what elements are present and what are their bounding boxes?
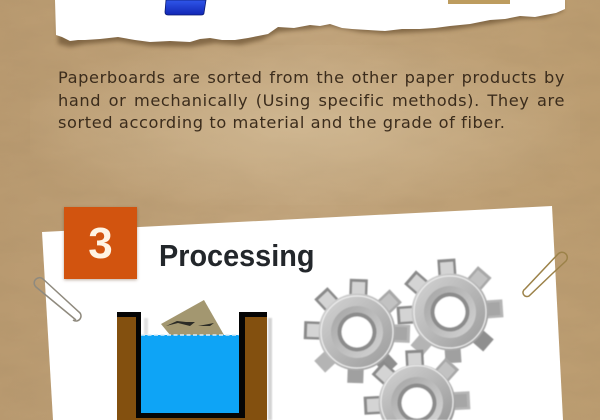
body text: sorted according to material and the grade of fiber. [58, 113, 506, 132]
step number badge [64, 207, 137, 279]
body text [58, 68, 565, 132]
icon: gear bottom [361, 347, 470, 420]
heading: Processing [159, 238, 314, 273]
step number badge: 3 [88, 219, 113, 268]
icon: cardboard box base [448, 0, 510, 4]
icon: paper clip left [34, 278, 81, 321]
icon: paper sinking in water [161, 300, 224, 335]
icon: paper clip right [523, 252, 567, 297]
icon: water tank [117, 300, 272, 420]
water [141, 335, 239, 413]
torn paper: top sheet [55, 0, 565, 47]
icon: blue bin base [165, 0, 206, 15]
body text: hand or mechanically (Using specific methods). They are [58, 91, 565, 110]
icon: gear left [302, 277, 412, 385]
body text: Paperboards are sorted from the other paper products by [58, 68, 565, 87]
icon: gear right [393, 255, 506, 367]
sheet: processing card [42, 206, 563, 420]
